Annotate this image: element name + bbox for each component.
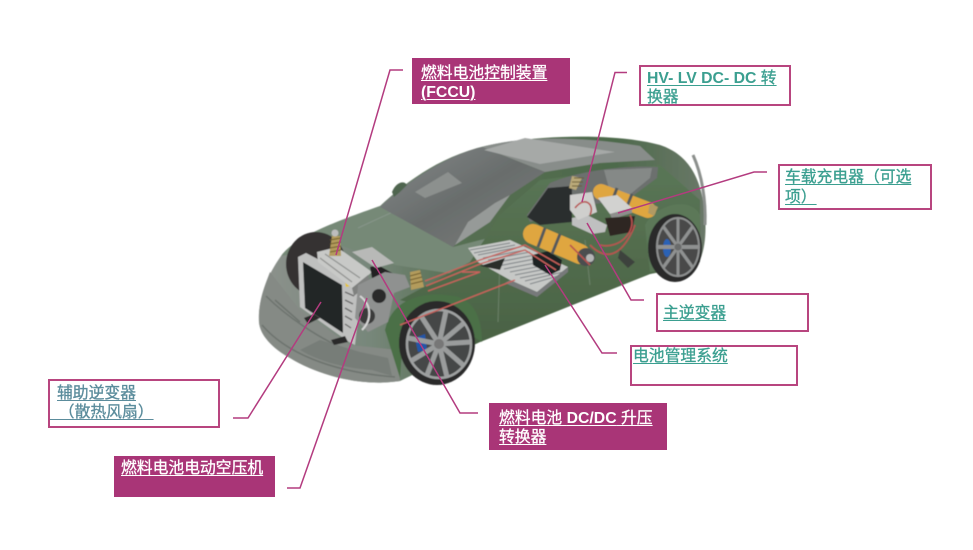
side door	[400, 165, 700, 346]
label: on-board charger: 项）	[785, 189, 817, 206]
leader: main inverter	[587, 223, 644, 300]
label: DC/DC boost converter: 转换器	[499, 429, 546, 446]
windshield	[380, 147, 545, 247]
hydrogen tank rear	[601, 188, 658, 216]
label: FCCU: 燃料电池控制装置	[421, 65, 547, 82]
rear wheel	[648, 214, 702, 282]
front springs	[329, 230, 424, 290]
label: battery management system	[630, 345, 798, 386]
fuel cell stack	[317, 247, 394, 296]
mirror	[392, 182, 407, 197]
label: HV-LV DC-DC converter	[639, 65, 791, 106]
label: main inverter	[656, 293, 809, 332]
leader: DC/DC boost	[372, 260, 478, 413]
front fender	[385, 294, 482, 378]
label: air compressor: 燃料电池电动空压机	[121, 460, 263, 477]
rear power electronics	[569, 176, 635, 268]
car body	[259, 137, 706, 383]
label: auxiliary inverter	[48, 379, 220, 428]
leader: auxiliary inverter	[233, 302, 321, 418]
label: auxiliary inverter: （散热风扇）	[59, 404, 154, 421]
label: HV-LV DC-DC converter: 换器	[647, 89, 679, 106]
coolant pipes	[400, 245, 560, 325]
leader: air compressor	[287, 298, 367, 488]
front wheel	[399, 301, 475, 385]
front bumper	[259, 272, 400, 383]
leader lines	[233, 70, 767, 488]
hood	[281, 206, 500, 275]
leader: battery management	[545, 265, 617, 353]
label: air compressor	[114, 456, 275, 497]
hydrogen tank front	[533, 228, 595, 266]
battery pack	[468, 240, 568, 297]
label: main inverter: 主逆变器	[663, 305, 726, 322]
label: battery management system: 电池管理系统	[633, 348, 728, 365]
label: on-board charger	[778, 164, 932, 210]
leader: FCCU	[336, 70, 403, 255]
label: FCCU	[412, 58, 570, 104]
air compressor	[355, 272, 410, 332]
leader: on-board charger	[618, 172, 767, 213]
front tyre well	[286, 232, 346, 296]
label: DC/DC boost converter: 燃料电池 DC/DC 升压	[499, 410, 653, 427]
leader: HV-LV converter	[582, 72, 627, 202]
front radiator	[298, 253, 362, 345]
label: DC/DC boost converter	[489, 403, 667, 450]
side window and cabin	[527, 167, 658, 222]
roof glass	[482, 139, 655, 172]
label: HV-LV DC-DC converter: HV- LV DC- DC 转	[647, 70, 777, 87]
label: on-board charger: 车载充电器（可选	[785, 169, 911, 186]
label: auxiliary inverter: 辅助逆变器	[57, 385, 136, 402]
rear fender	[645, 204, 700, 272]
label: FCCU: (FCCU)	[421, 84, 475, 101]
